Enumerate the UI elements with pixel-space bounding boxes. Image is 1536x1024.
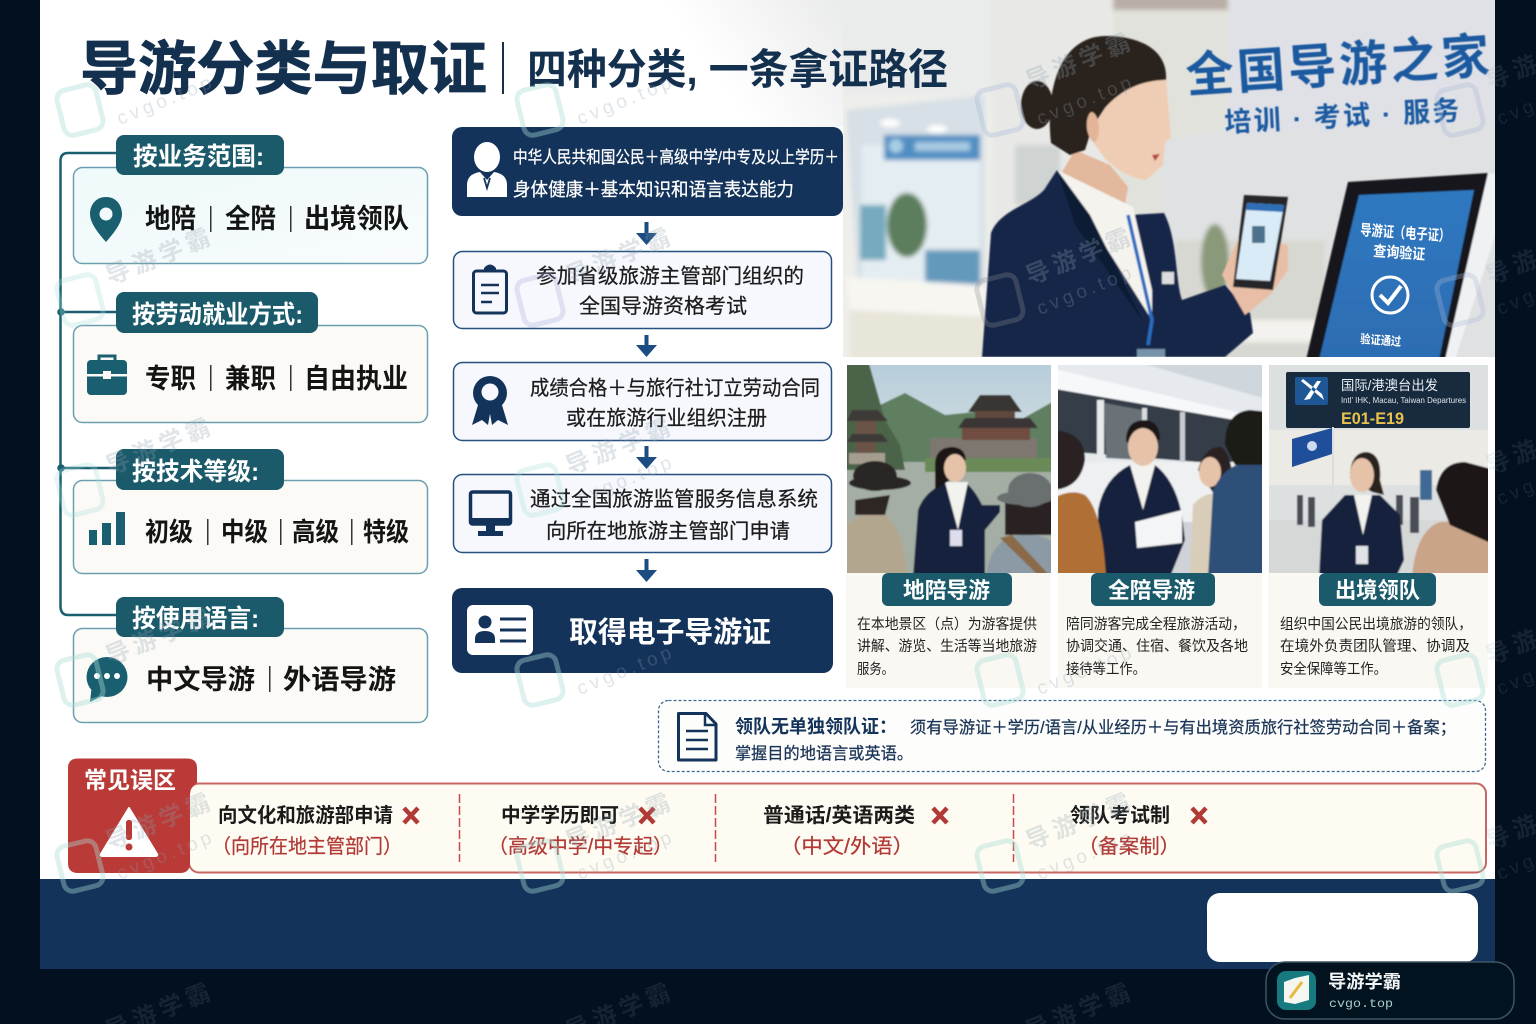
classification tree connector bbox=[58, 153, 116, 615]
hero photo: guide at service centre: 查询验证 bbox=[1373, 242, 1426, 264]
description: 安全保障等工作。 bbox=[1280, 660, 1387, 678]
hero photo: guide at service centre: 验证通过 bbox=[1360, 331, 1402, 349]
options row: 特级 bbox=[363, 517, 409, 547]
options row: 自由执业 bbox=[304, 364, 408, 394]
watermarks: cvgo.top bbox=[114, 73, 215, 130]
watermarks: cvgo.top bbox=[114, 828, 215, 885]
options row: 外语导游 bbox=[283, 665, 396, 695]
photo: tour leader at airport departures: E01-E19 bbox=[1341, 409, 1404, 428]
watermarks: cvgo.top bbox=[1034, 263, 1135, 320]
misconception dividers bbox=[460, 794, 1014, 862]
woman bbox=[1021, 81, 1053, 129]
panel: common misconceptions bbox=[68, 758, 1486, 873]
description: 组织中国公民出境旅游的领队， bbox=[1280, 615, 1472, 633]
description: 接待等工作。 bbox=[1066, 660, 1146, 678]
flow step 2: exam: 全国导游资格考试 bbox=[579, 295, 747, 318]
flow step 1: eligibility: 身体健康＋基本知识和语言表达能力 bbox=[513, 179, 794, 200]
watermarks: cvgo.top bbox=[574, 453, 675, 510]
options row bbox=[145, 364, 408, 394]
options row bbox=[145, 204, 409, 234]
description: 服务。 bbox=[857, 661, 894, 678]
tag: by language bbox=[116, 597, 284, 637]
label: local guide: 地陪导游 bbox=[903, 578, 990, 603]
hero photo: guide at service centre: 培训 · 考试 · 服务 bbox=[1224, 96, 1460, 138]
icon: warning triangle bbox=[101, 808, 157, 856]
hero photo: guide at service centre bbox=[835, 0, 1505, 365]
icon: map logo bbox=[1277, 971, 1316, 1010]
options row: 初级 bbox=[145, 517, 193, 547]
footer white blank card bbox=[1207, 893, 1478, 962]
watermarks: cvgo.top bbox=[1034, 828, 1135, 885]
description bbox=[857, 616, 1037, 678]
misconception 3: （中文/外语） bbox=[780, 835, 914, 858]
description bbox=[1280, 615, 1472, 678]
tag: common misconceptions: 常见误区 bbox=[84, 767, 176, 793]
photo: national guide with tour group by bus bbox=[1058, 365, 1262, 573]
flow step 3: contract or registration bbox=[454, 362, 832, 440]
brand badge bbox=[1266, 962, 1514, 1019]
icon: bar chart bbox=[89, 512, 125, 545]
watermarks: 导游学霸 bbox=[1022, 29, 1134, 96]
description bbox=[1066, 615, 1248, 678]
misconception 3: 普通话/英语两类 bbox=[763, 804, 915, 827]
label: national guide: 全陪导游 bbox=[1108, 578, 1195, 603]
watermarks: 导游学霸 bbox=[102, 224, 214, 291]
flow step 5: e-guide licence bbox=[452, 588, 833, 673]
options row: 出境领队 bbox=[304, 204, 409, 234]
watermarks: 导游学霸 bbox=[1022, 224, 1134, 291]
label: outbound tour leader: 出境领队 bbox=[1335, 578, 1420, 603]
description: 在境外负责团队管理、协调及 bbox=[1280, 637, 1470, 655]
panel: by skill grade bbox=[74, 449, 428, 574]
options row bbox=[146, 665, 396, 695]
photo: local guide at scenic site bbox=[847, 365, 1051, 573]
watermarks: 导游学霸 bbox=[1022, 789, 1134, 856]
arrow bbox=[636, 446, 657, 469]
icon: monitor bbox=[470, 492, 511, 536]
footer band bbox=[40, 879, 1495, 969]
tablet bbox=[1440, 173, 1497, 360]
note: tour leader has no separate licence: 须有导游证＋学历/语言/从业经历＋与有出境资质旅行社签劳动合同＋备案； bbox=[910, 718, 1456, 737]
watermarks: 导游学霸 bbox=[102, 414, 214, 481]
title: 四种分类, 一条拿证路径 bbox=[527, 46, 948, 93]
sign wall text: 全国导游之家 bbox=[1184, 30, 1491, 103]
watermarks: 导游学霸 bbox=[562, 224, 674, 291]
panel: local guide bbox=[840, 360, 1060, 688]
label: outbound tour leader bbox=[1319, 573, 1436, 606]
misconception 1: 向文化和旅游部申请 bbox=[218, 803, 393, 827]
brand badge: cvgo.top bbox=[1329, 998, 1393, 1011]
note: tour leader has no separate licence: 掌握目的地语言或英语。 bbox=[735, 744, 913, 763]
description: 在本地景区（点）为游客提供 bbox=[857, 616, 1037, 633]
tag: by employment type bbox=[116, 292, 318, 333]
watermarks: cvgo.top bbox=[574, 828, 675, 885]
tag: by business scope bbox=[116, 135, 284, 175]
panel: by language bbox=[74, 597, 428, 722]
title bbox=[80, 37, 948, 102]
photo: tour leader at airport departures bbox=[1269, 365, 1488, 573]
arrow bbox=[636, 559, 657, 582]
flow step 5: e-guide licence: 取得电子导游证 bbox=[569, 616, 771, 649]
tag: by language: 按使用语言: bbox=[132, 605, 259, 633]
watermarks: 导游学霸 bbox=[562, 414, 674, 481]
misconception 1: （向所在地主管部门） bbox=[212, 835, 402, 858]
brand badge: 导游学霸 bbox=[1328, 971, 1401, 992]
flow step 2: exam bbox=[454, 252, 832, 328]
icon: briefcase bbox=[87, 356, 127, 395]
misconception 1 bbox=[212, 803, 418, 858]
flow step 3: contract or registration: 或在旅游行业组织注册 bbox=[566, 407, 767, 430]
title: 导游分类与取证 bbox=[80, 37, 487, 102]
description: 陪同游客完成全程旅游活动， bbox=[1066, 615, 1246, 633]
watermarks: cvgo.top bbox=[1034, 73, 1135, 130]
misconception 4 bbox=[1070, 804, 1206, 858]
tag: by employment type: 按劳动就业方式: bbox=[132, 300, 303, 329]
watermarks: 导游学霸 bbox=[102, 604, 214, 671]
misconception 4: 领队考试制 bbox=[1070, 804, 1170, 827]
icon: person bbox=[467, 142, 507, 197]
flow step 4: online application: 通过全国旅游监管服务信息系统 bbox=[530, 488, 818, 511]
note: tour leader has no separate licence bbox=[658, 700, 1486, 772]
arrow bbox=[636, 335, 657, 357]
description: 讲解、游览、生活等当地旅游 bbox=[857, 637, 1037, 655]
tag: common misconceptions bbox=[68, 758, 197, 873]
options row: 全陪 bbox=[225, 204, 276, 234]
watermarks: cvgo.top bbox=[574, 643, 675, 700]
options row: 中级 bbox=[221, 517, 268, 547]
label: national guide bbox=[1091, 573, 1215, 606]
flow step 3: contract or registration: 成绩合格＋与旅行社订立劳动合同 bbox=[530, 377, 820, 400]
tag: by skill grade bbox=[116, 449, 284, 490]
panel: national guide bbox=[1050, 360, 1270, 688]
watermarks: cvgo.top bbox=[1034, 643, 1135, 700]
icon: rosette bbox=[472, 376, 508, 425]
hero photo: guide at service centre: 导游证（电子证） bbox=[1360, 221, 1451, 245]
flow step 4: online application: 向所在地旅游主管部门申请 bbox=[546, 520, 790, 543]
panel: by employment type bbox=[74, 292, 428, 422]
flow step 4: online application bbox=[454, 474, 832, 552]
panel: by business scope bbox=[74, 135, 428, 264]
icon: id card bbox=[467, 605, 533, 655]
label: local guide bbox=[882, 573, 1012, 606]
options row: 中文导游 bbox=[146, 665, 255, 695]
options row: 兼职 bbox=[225, 364, 276, 394]
misconception 2: 中学学历即可 bbox=[501, 804, 619, 827]
arrow bbox=[636, 222, 657, 245]
options row: 地陪 bbox=[145, 204, 196, 234]
options row: 高级 bbox=[292, 517, 339, 547]
options row: 专职 bbox=[145, 364, 196, 394]
misconception 3 bbox=[763, 804, 947, 858]
flow step 1: eligibility: 中华人民共和国公民＋高级中学/中专及以上学历＋ bbox=[513, 148, 839, 167]
note: tour leader has no separate licence: 领队无单独领队证： bbox=[735, 716, 897, 737]
tag: by business scope: 按业务范围: bbox=[133, 143, 264, 171]
photo: tour leader at airport departures: 国际/港澳台出发 bbox=[1341, 378, 1438, 393]
misconception 2 bbox=[488, 804, 673, 858]
watermarks: 导游学霸 bbox=[562, 789, 674, 856]
icon: location pin bbox=[90, 197, 122, 242]
watermarks: 导游学霸 bbox=[102, 789, 214, 856]
photo: tour leader at airport departures: Intl' IHK, Macau, Taiwan Departures bbox=[1341, 396, 1466, 405]
misconception 2: （高级中学/中专起） bbox=[488, 835, 673, 858]
top background fade bbox=[600, 0, 843, 127]
office interior bbox=[846, 95, 985, 290]
icon: document bbox=[678, 713, 716, 760]
tag: by skill grade: 按技术等级: bbox=[132, 458, 259, 486]
panel: outbound tour leader bbox=[1260, 360, 1495, 688]
flow step 2: exam: 参加省级旅游主管部门组织的 bbox=[536, 265, 804, 288]
misconception 4: （备案制） bbox=[1078, 835, 1180, 858]
icon: speech bubble bbox=[86, 657, 128, 702]
icon: clipboard bbox=[474, 264, 506, 313]
options row bbox=[145, 517, 409, 547]
description: 协调交通、住宿、餐饮及各地 bbox=[1066, 637, 1248, 655]
flow step 1: eligibility bbox=[452, 127, 843, 216]
watermarks: cvgo.top bbox=[574, 73, 675, 130]
